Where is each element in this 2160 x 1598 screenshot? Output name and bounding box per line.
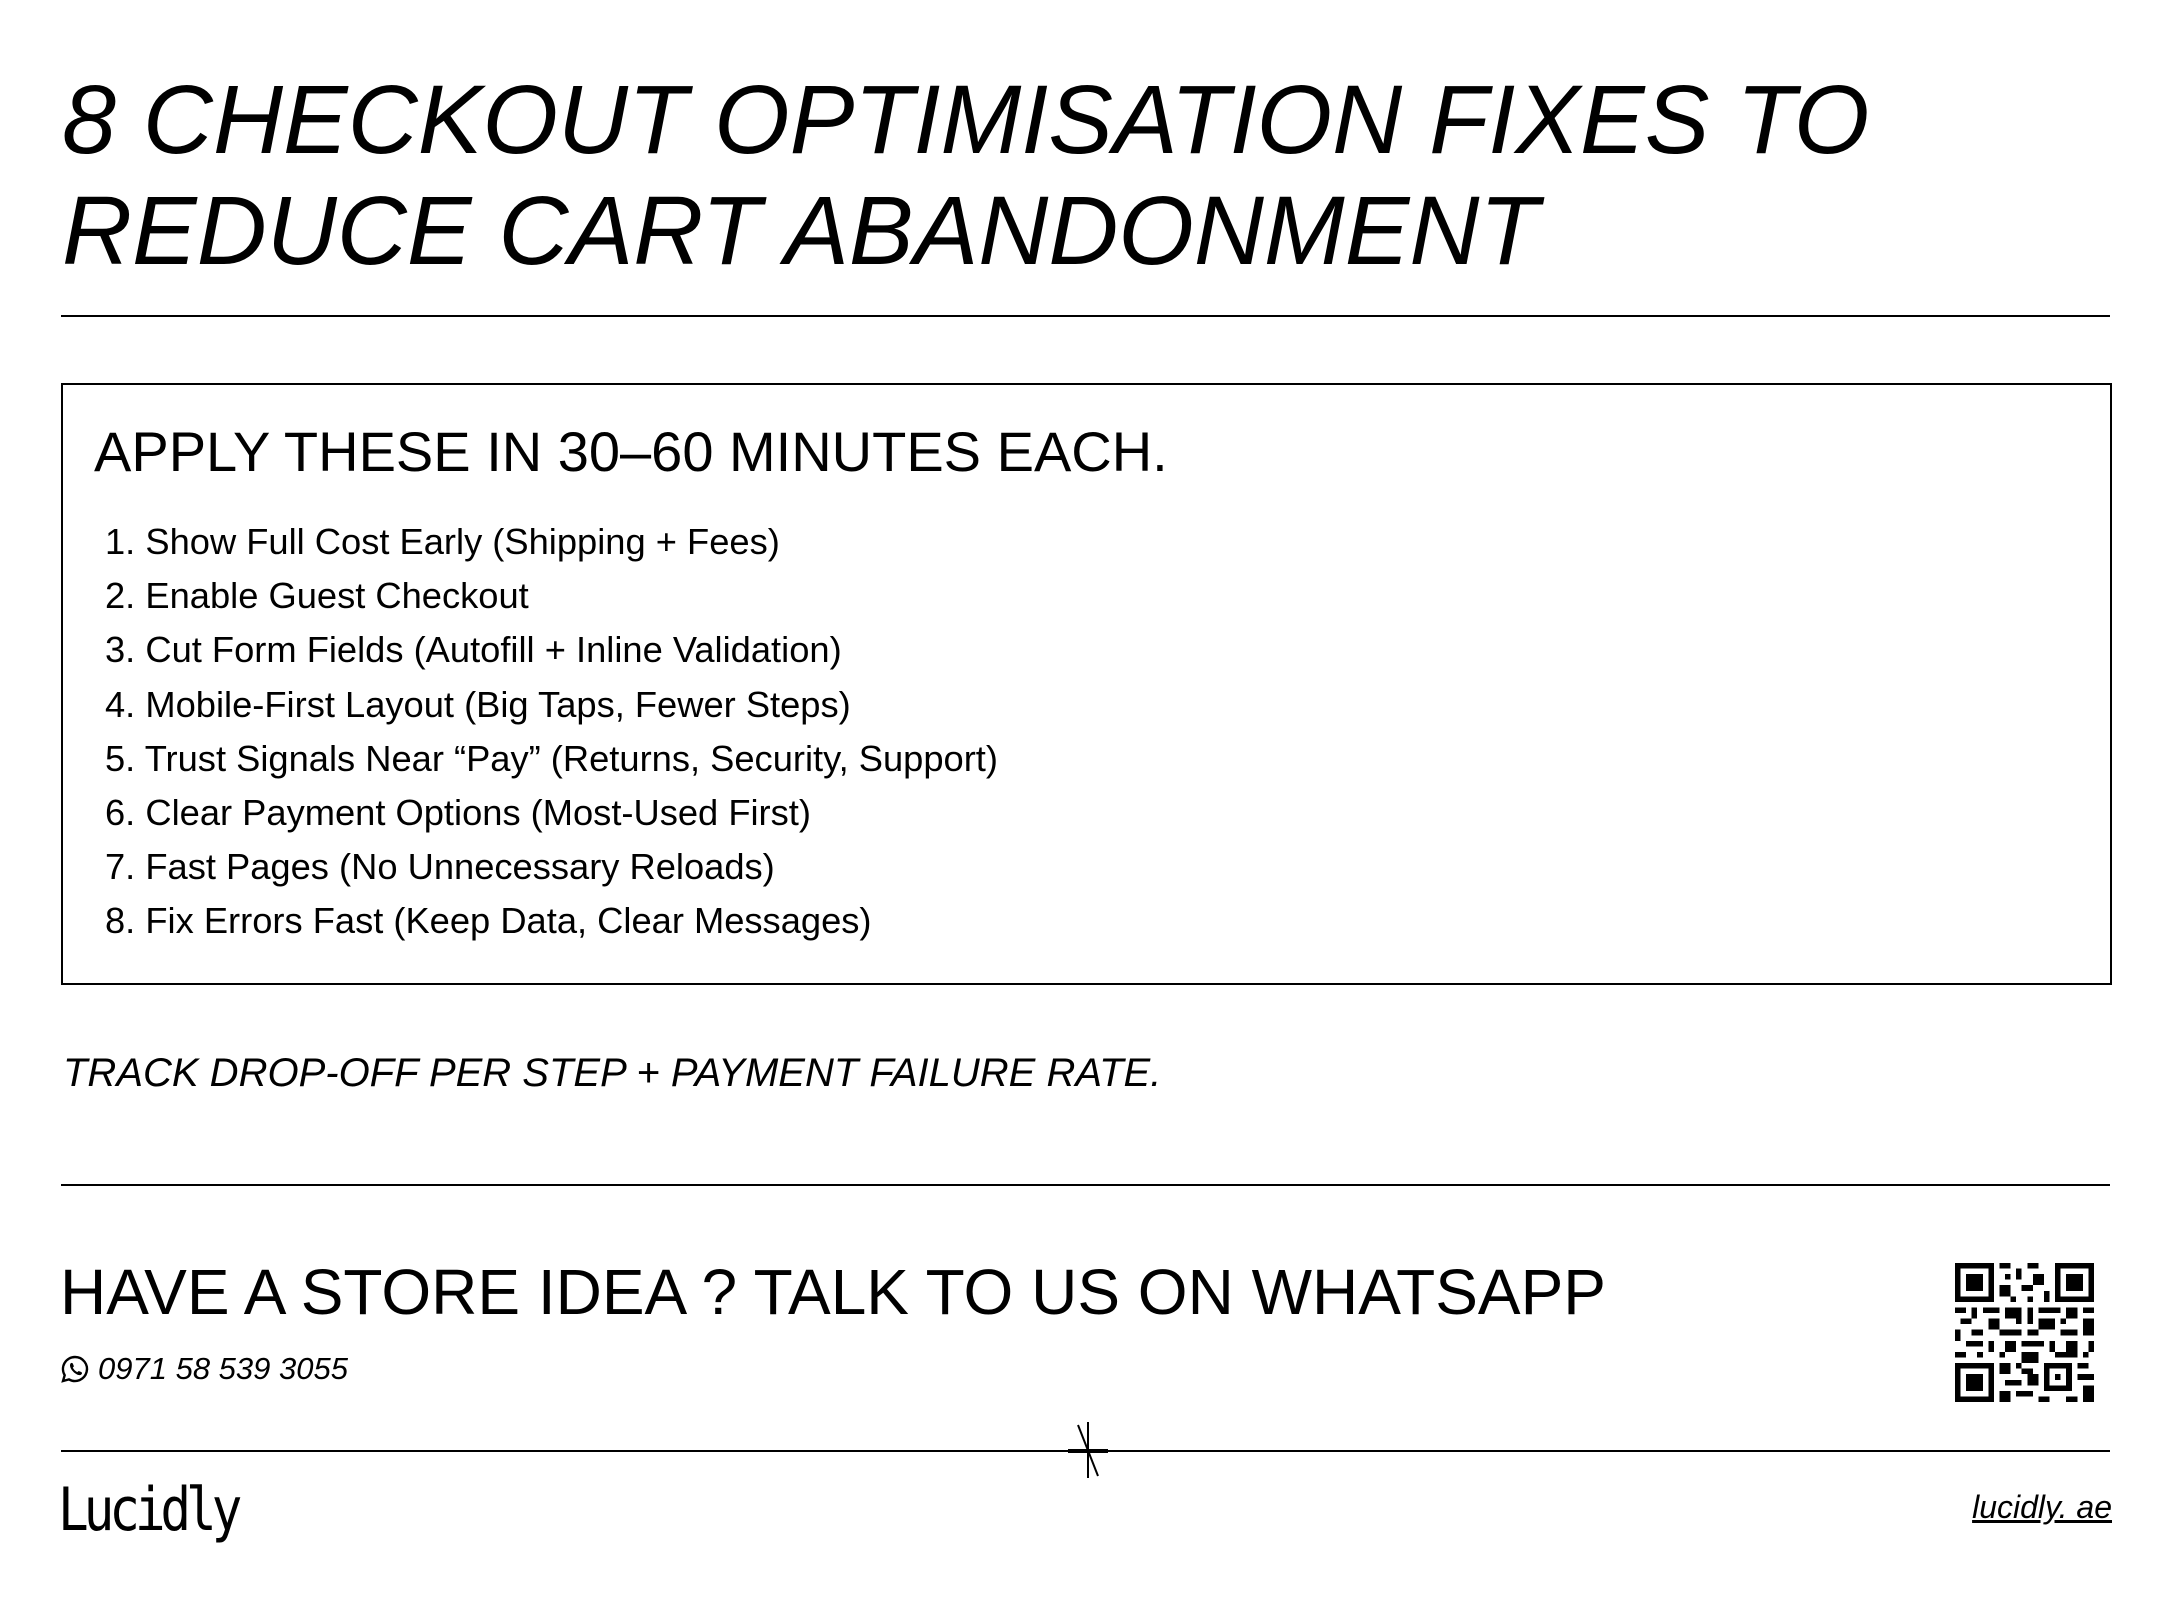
numbered list: 7. Fast Pages (No Unnecessary Reloads) [105, 846, 775, 887]
numbered list: 2. Enable Guest Checkout [105, 575, 529, 616]
numbered list: 1. Show Full Cost Early (Shipping + Fees) [105, 521, 780, 562]
numbered list: 4. Mobile-First Layout (Big Taps, Fewer Steps) [105, 684, 851, 725]
numbered list: 5. Trust Signals Near “Pay” (Returns, Security, Support) [105, 738, 998, 779]
numbered list [105, 521, 998, 941]
numbered list: 8. Fix Errors Fast (Keep Data, Clear Messages) [105, 900, 872, 941]
icon: whatsapp [61, 1356, 88, 1383]
panel: fixes list [61, 383, 2112, 985]
panel heading: APPLY THESE IN 30–60 MINUTES EACH. [94, 420, 1168, 483]
CTA heading: HAVE A STORE IDEA ? TALK TO US ON WHATSAPP [60, 1256, 1606, 1328]
icon: QR code [1955, 1263, 2094, 1402]
title: REDUCE CART ABANDONMENT [62, 176, 1539, 285]
title: 8 CHECKOUT OPTIMISATION FIXES TO [62, 65, 1869, 174]
website link: lucidly. ae [1972, 1489, 2112, 1525]
logo: Lucidly: Lucidly [58, 1475, 237, 1545]
numbered list: 6. Clear Payment Options (Most-Used First) [105, 792, 811, 833]
title [62, 65, 1869, 285]
tracking note: TRACK DROP-OFF PER STEP + PAYMENT FAILURE RATE. [63, 1051, 1161, 1095]
icon: cross star [1068, 1422, 1108, 1478]
numbered list: 3. Cut Form Fields (Autofill + Inline Validation) [105, 629, 842, 670]
phone contact: 0971 58 539 3055 [98, 1351, 348, 1386]
